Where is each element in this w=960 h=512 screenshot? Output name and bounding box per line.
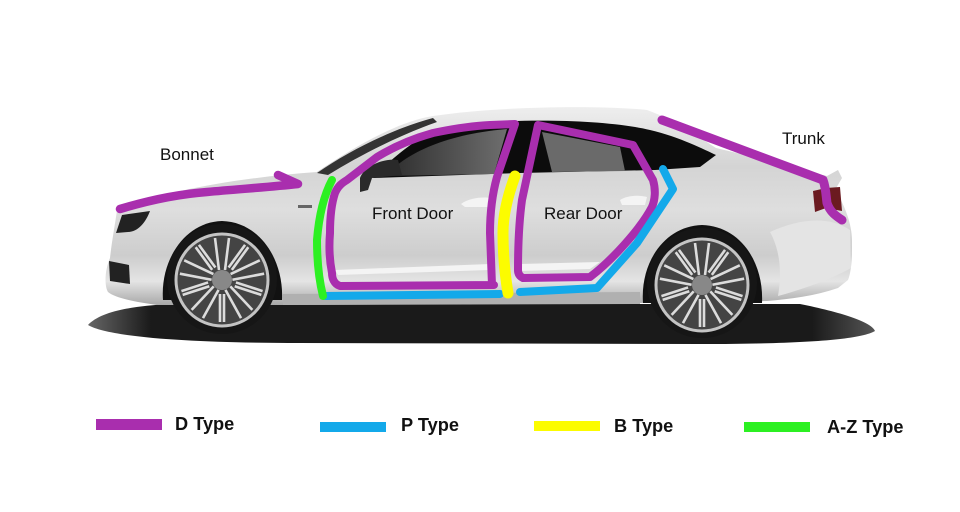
legend: A-Z Type	[744, 417, 903, 437]
front window glass	[385, 129, 507, 176]
seal: P type front sill	[325, 294, 500, 296]
windscreen strip	[317, 118, 437, 175]
label: Front Door: Front Door	[372, 204, 454, 223]
fog lamp	[109, 261, 130, 284]
front wheel arch	[163, 221, 282, 300]
legend: P Type	[320, 415, 459, 435]
badge	[298, 205, 312, 208]
sill shading	[283, 292, 640, 305]
seal: front door D type	[329, 124, 515, 286]
side glass	[373, 121, 716, 178]
legend: B Type	[534, 416, 673, 436]
label: Bonnet: Bonnet	[160, 145, 214, 164]
seal: rear door D type	[518, 125, 655, 278]
mirror	[360, 160, 402, 192]
legend: D Type	[96, 414, 234, 434]
legend: D Type: D Type	[175, 414, 234, 434]
rear window glass	[542, 132, 625, 172]
legend: P Type: P Type	[401, 415, 459, 435]
seal: B type	[503, 176, 515, 293]
seal: trunk D type	[662, 120, 842, 220]
legend: B Type: B Type	[614, 416, 673, 436]
headlight	[116, 211, 150, 233]
seal: bonnet D type	[120, 175, 298, 209]
seal: P type rear	[520, 169, 673, 292]
car illustration	[106, 107, 852, 305]
legend: A-Z Type: A-Z Type	[827, 417, 903, 437]
ground shadow	[88, 304, 875, 344]
tail light	[813, 187, 842, 212]
car body	[106, 107, 852, 305]
rear wheel	[647, 228, 757, 338]
door highlight band	[335, 262, 600, 275]
front wheel	[167, 224, 277, 334]
label: Trunk: Trunk	[782, 129, 825, 148]
label: Rear Door: Rear Door	[544, 204, 623, 223]
seal: A-Z type	[317, 180, 332, 296]
door handles	[461, 196, 647, 207]
rear wheel arch	[643, 225, 762, 303]
rear haunch highlight	[770, 220, 851, 296]
